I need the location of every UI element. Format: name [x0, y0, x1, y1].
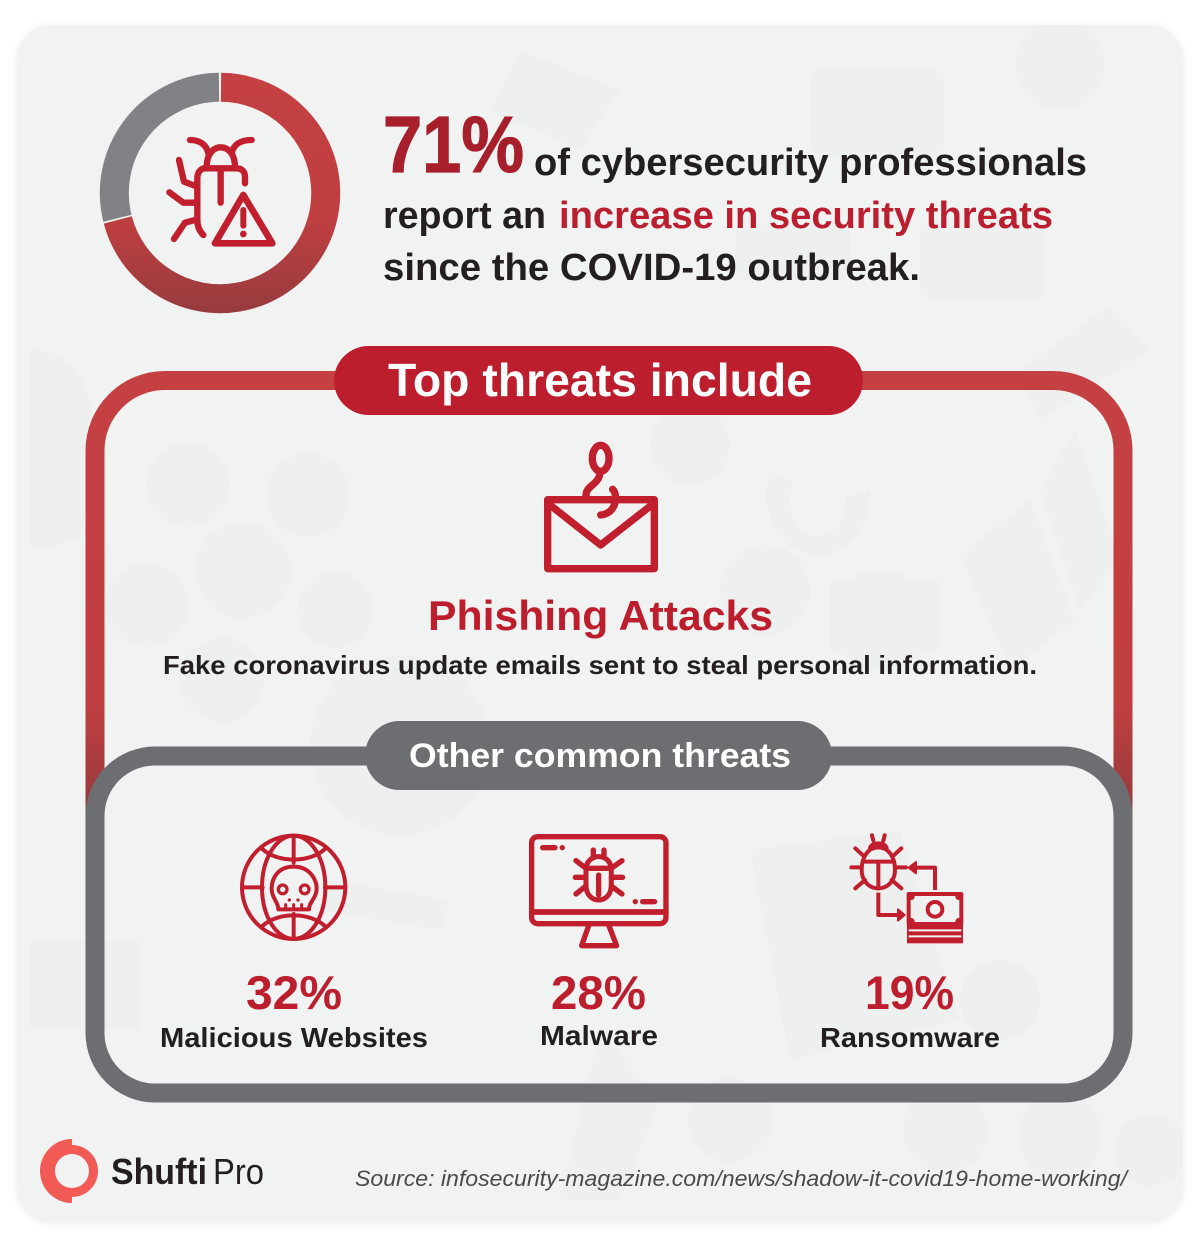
icon: phishing hook and envelope [548, 445, 654, 569]
heading: other common threats: Other common threats [409, 737, 791, 775]
heading: top threats include [334, 346, 863, 415]
panel: other common threats outline [95, 756, 1123, 1093]
donut segment: 29% grey [114, 87, 219, 218]
donut chart: 71% [114, 87, 326, 299]
description: phishing: Fake coronavirus update emails sent to steal personal information. [163, 650, 1037, 680]
icon: monitor with bug [532, 837, 666, 946]
logo: Shufti Pro: Pro [213, 1151, 264, 1192]
icon: bug and money exchange [851, 835, 963, 943]
heading: other common threats [365, 721, 832, 790]
stat: malware: Malware [540, 1020, 658, 1051]
icon: globe with skull [242, 836, 345, 939]
logo: Shufti Pro: Shufti [111, 1151, 207, 1192]
logo: Shufti Pro [40, 1139, 264, 1203]
source citation: Source: infosecurity-magazine.com/news/shadow-it-covid19-home-working/ [355, 1166, 1129, 1191]
stat: malware [540, 966, 658, 1051]
stat: malicious websites [160, 966, 428, 1053]
panel: top threats outline [95, 380, 1123, 816]
headline statistic: report an [383, 195, 546, 237]
icon: bug with warning triangle [169, 140, 272, 243]
donut segment: 71% red [118, 87, 326, 299]
stat: malicious websites: Malicious Websites [160, 1022, 428, 1053]
stat: malware: 28% [551, 966, 646, 1019]
headline statistic: increase in security threats [559, 195, 1053, 237]
heading: top threats include: Top threats include [388, 354, 812, 406]
stat: ransomware [820, 966, 1000, 1053]
headline statistic: 71% [383, 100, 524, 189]
headline statistic: since the COVID-19 outbreak. [383, 247, 920, 289]
stat: malicious websites: 32% [246, 966, 342, 1019]
stat: ransomware: Ransomware [820, 1022, 1000, 1053]
stat: ransomware: 19% [865, 966, 954, 1019]
headline statistic: of cybersecurity professionals [534, 142, 1087, 184]
icon: logo ring [40, 1139, 98, 1203]
heading: phishing attacks: Phishing Attacks [428, 592, 773, 639]
headline statistic [383, 100, 1087, 289]
